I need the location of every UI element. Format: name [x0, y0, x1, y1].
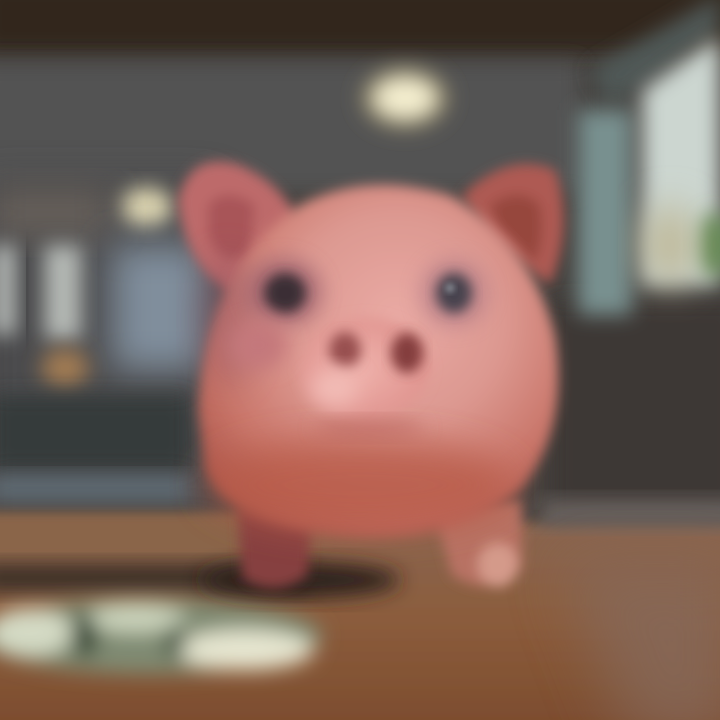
pig left cheek	[228, 321, 288, 369]
ceiling lamp	[361, 66, 449, 130]
pig body	[198, 185, 558, 537]
blurred shelves on the left	[0, 187, 207, 500]
cash on the table	[0, 598, 322, 674]
pig right ear	[462, 164, 564, 285]
pig left ear	[178, 162, 300, 295]
window on the right	[578, 0, 720, 315]
pig dark left side	[202, 255, 254, 385]
pig right eye	[420, 259, 488, 327]
pig belly shading	[205, 440, 515, 530]
pig left eye	[246, 258, 322, 326]
wooden table surface	[0, 500, 720, 720]
pig snout shadow	[315, 419, 425, 437]
pig legs	[238, 500, 522, 588]
pig shadow	[200, 562, 400, 598]
piggy bank	[178, 162, 564, 588]
pig snout	[301, 318, 429, 418]
